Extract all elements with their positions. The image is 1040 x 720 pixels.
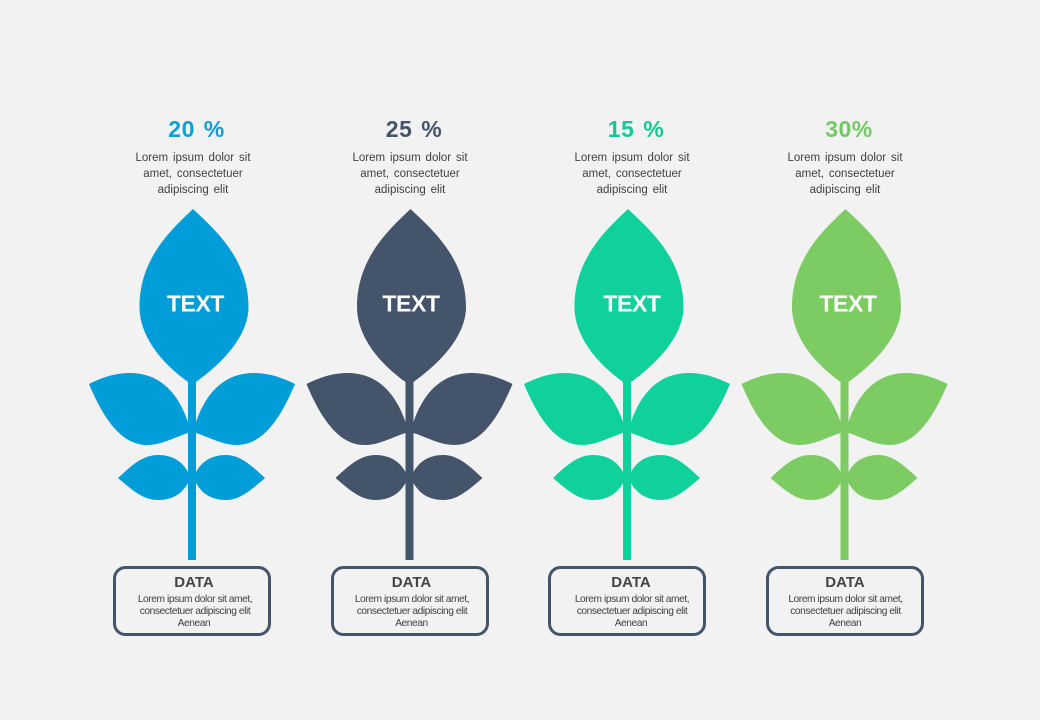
description text: adipiscing elit: [810, 184, 881, 196]
data box: Aenean: [178, 618, 210, 629]
leaf label: TEXT: [382, 290, 440, 316]
data box: consectetuer adipiscing elit: [790, 606, 901, 617]
data box: Aenean: [395, 618, 428, 629]
description text: Lorem ipsum dolor sit: [135, 152, 251, 164]
leaf label: TEXT: [603, 290, 661, 316]
data box: Lorem ipsum dolor sit amet,: [788, 594, 903, 605]
percentage: 15 %: 15 %: [608, 116, 664, 142]
data box: Aenean: [615, 618, 647, 629]
description text: Lorem ipsum dolor sit: [352, 152, 468, 164]
data box: [332, 568, 488, 634]
icon: plant: [89, 209, 295, 560]
icon: plant: [742, 209, 948, 560]
description text: adipiscing elit: [375, 184, 446, 196]
column 2: 25 percent: [306, 116, 512, 634]
data box: DATA: [392, 574, 431, 591]
column 1: 20 percent: [89, 116, 295, 634]
leaf label: TEXT: [167, 290, 224, 316]
description text: Lorem ipsum dolor sit: [787, 152, 903, 164]
description text: adipiscing elit: [158, 184, 229, 196]
data box: consectetuer adipiscing elit: [577, 606, 688, 617]
data box: [768, 568, 922, 634]
column 4: 30 percent: [742, 116, 948, 634]
data box: consectetuer adipiscing elit: [140, 606, 251, 617]
description text: Lorem ipsum dolor sit: [574, 152, 690, 164]
description text: amet, consectetuer: [795, 168, 895, 180]
data box: Lorem ipsum dolor sit amet,: [138, 594, 252, 605]
data box: Lorem ipsum dolor sit amet,: [355, 594, 469, 605]
column 3: 15 percent: [524, 116, 730, 634]
leaf label: TEXT: [819, 290, 877, 316]
description text: amet, consectetuer: [582, 168, 682, 180]
data box: consectetuer adipiscing elit: [357, 606, 468, 617]
data box: Aenean: [829, 618, 861, 629]
description text: amet, consectetuer: [143, 168, 243, 180]
description text: amet, consectetuer: [360, 168, 460, 180]
data box: DATA: [174, 574, 214, 591]
description text: adipiscing elit: [597, 184, 668, 196]
data box: Lorem ipsum dolor sit amet,: [575, 594, 689, 605]
data box: [114, 568, 270, 634]
percentage: 20 %: 20 %: [168, 116, 225, 142]
data box: [550, 568, 704, 634]
icon: plant: [306, 209, 512, 560]
percentage: 30%: 30%: [825, 116, 873, 142]
data box: DATA: [611, 574, 651, 591]
data box: DATA: [825, 574, 865, 591]
icon: plant: [524, 209, 730, 560]
percentage: 25 %: 25 %: [386, 116, 442, 142]
